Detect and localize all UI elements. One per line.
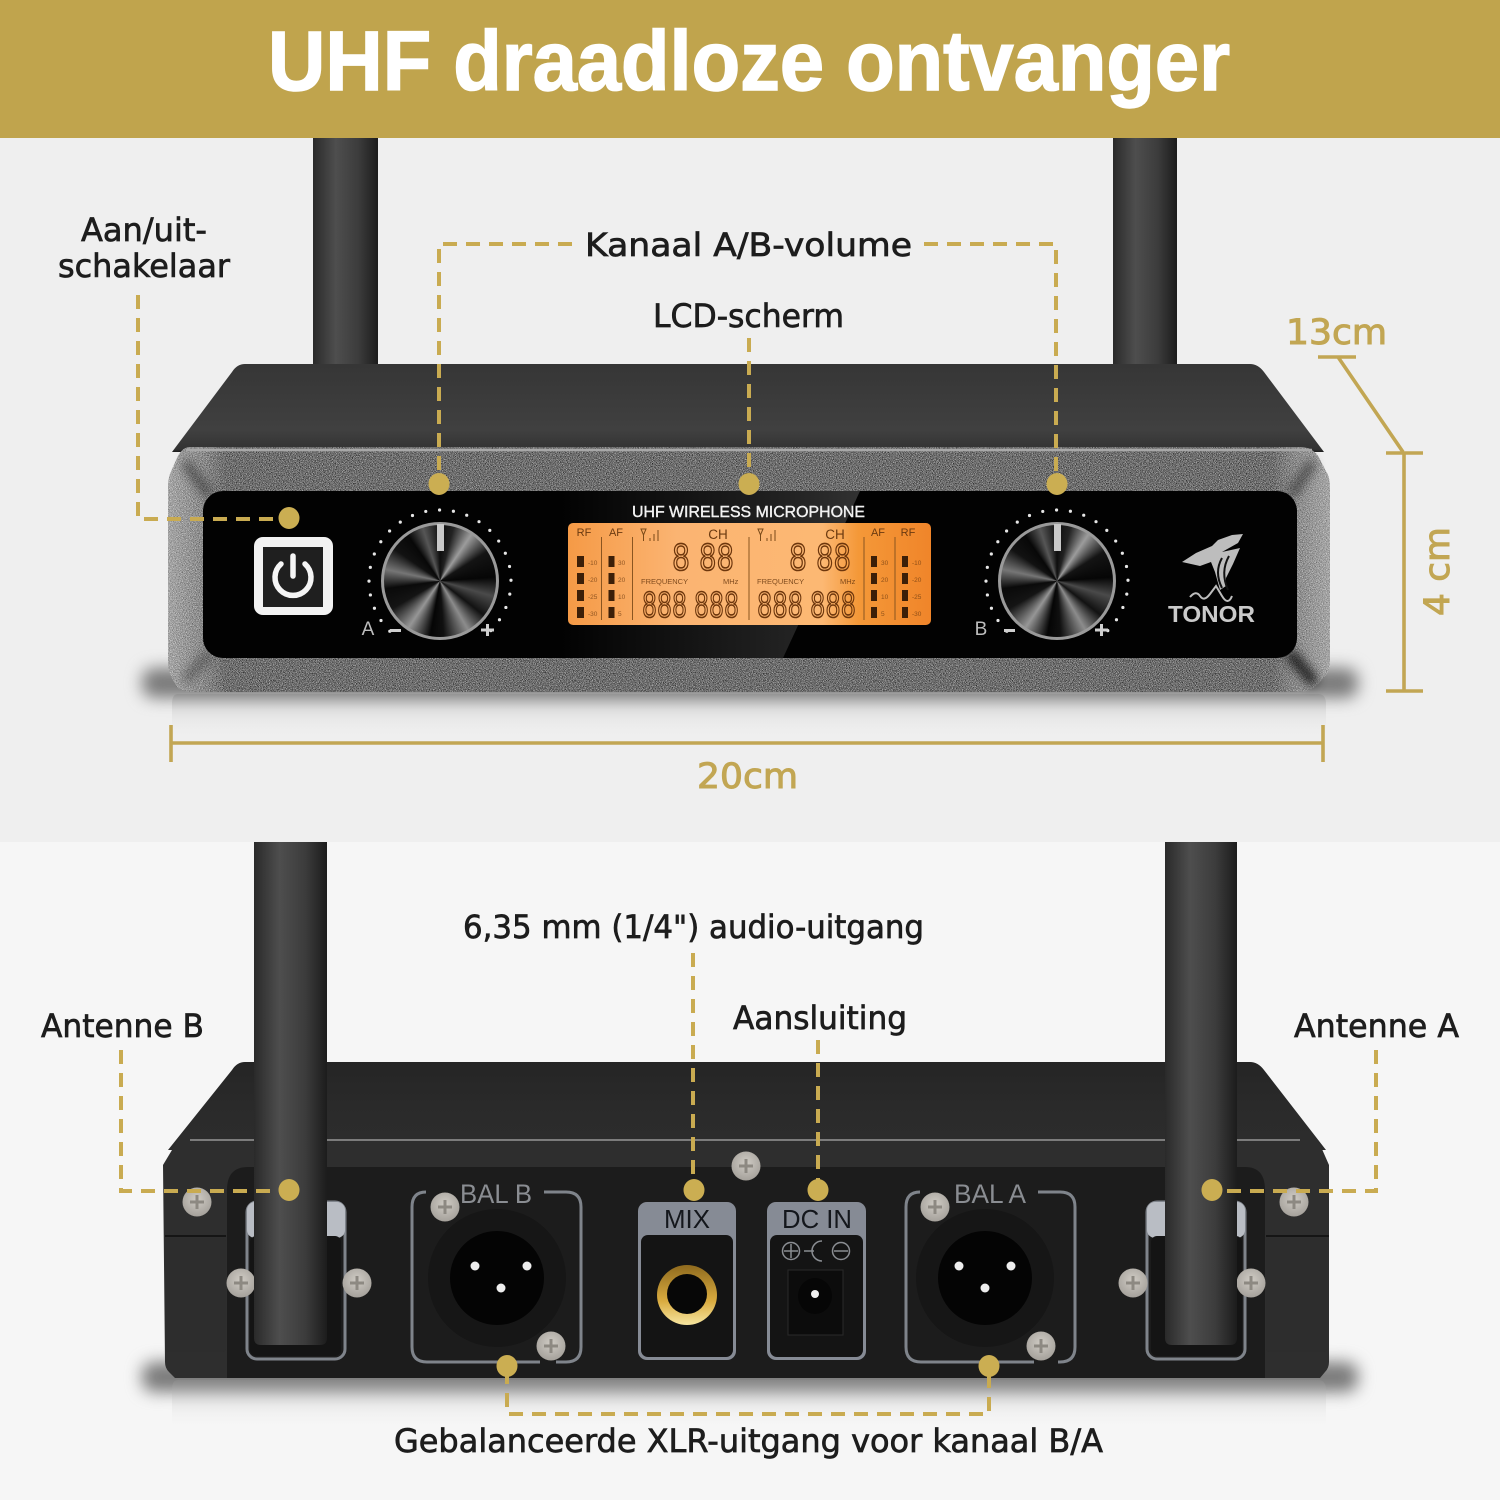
antenna: top left	[313, 138, 378, 368]
XLR plate A: BAL A	[954, 1179, 1026, 1209]
title band	[0, 0, 1500, 138]
knob A	[362, 510, 511, 640]
label: audio output	[463, 908, 924, 1201]
LCD screen: AF	[871, 527, 885, 539]
antenna: top right	[1113, 138, 1177, 368]
LCD screen: AF	[609, 527, 623, 539]
LCD screen: FREQUENCY	[757, 577, 804, 586]
LCD screen: 30	[881, 560, 889, 567]
TONOR logo: TONOR	[1168, 601, 1255, 627]
LCD screen: 8	[672, 538, 690, 583]
DC IN socket: DC IN	[782, 1204, 852, 1234]
knob B	[975, 510, 1128, 640]
LCD screen: -10	[588, 560, 598, 567]
label: channel volume: Kanaal A/B-volume	[585, 226, 912, 264]
LCD screen: 888	[642, 586, 687, 629]
LCD screen: 20	[618, 577, 626, 584]
title: UHF draadloze ontvanger	[268, 14, 1230, 108]
reflection	[172, 1380, 1326, 1428]
antenna screws left	[182, 1188, 372, 1298]
LCD screen: 30	[618, 560, 626, 567]
LCD screen: 88	[816, 538, 851, 583]
device rear face	[163, 1140, 1329, 1378]
reflection	[172, 694, 1326, 738]
TONOR logo	[1168, 534, 1255, 627]
MIX jack	[638, 1202, 736, 1360]
LCD screen: -30	[588, 611, 598, 618]
LCD screen: RF	[901, 527, 916, 539]
LCD screen: -30	[912, 611, 922, 618]
label: LCD screen	[653, 297, 844, 495]
top panel background	[0, 138, 1500, 842]
dimension: width 20cm	[171, 725, 1323, 797]
device top surface	[168, 1062, 1326, 1150]
antenna screws right	[1118, 1188, 1308, 1298]
label: balanced XLR outputs: Gebalanceerde XLR-uitgang voor kanaal B/A	[394, 1422, 1103, 1460]
dimension: width 20cm: 20cm	[697, 757, 798, 797]
center screw	[732, 1152, 760, 1180]
label: LCD screen: LCD-scherm	[653, 297, 844, 335]
LCD screen: 88	[699, 538, 734, 583]
dimension: depth 13cm	[1286, 313, 1403, 452]
LCD heading: UHF WIRELESS MICROPHONE	[632, 504, 865, 521]
left antenna port plate	[247, 1202, 345, 1359]
label: antenna A: Antenne A	[1294, 1007, 1459, 1045]
XLR plate B	[412, 1179, 581, 1362]
dimension: height 4 cm	[1386, 453, 1458, 691]
power button	[254, 537, 333, 615]
black control panel	[203, 491, 1297, 658]
device front face	[168, 447, 1330, 692]
LCD screen: 888	[694, 586, 739, 629]
XLR plate A	[906, 1179, 1075, 1362]
label: channel volume	[428, 226, 1068, 495]
LCD screen: 5	[881, 611, 885, 618]
dimension: height 4 cm: 4 cm	[1418, 527, 1458, 616]
shadow	[142, 1362, 1358, 1392]
LCD screen: -25	[912, 594, 922, 601]
label: power switch: Aan/uit-	[81, 211, 207, 249]
LCD screen: FREQUENCY	[641, 577, 688, 586]
LCD screen: MHz	[723, 577, 739, 586]
bottom panel background	[0, 842, 1500, 1500]
knob B: B	[975, 619, 987, 640]
label: antenna B	[41, 1007, 300, 1201]
LCD screen: -20	[912, 577, 922, 584]
device top surface	[172, 364, 1324, 452]
LCD screen: -10	[912, 560, 922, 567]
antenna: rear left	[254, 842, 327, 1345]
label: antenna A	[1202, 1007, 1459, 1201]
LCD screen: CH	[825, 527, 845, 542]
label: balanced XLR outputs	[394, 1355, 1103, 1460]
LCD screen: 8	[789, 538, 807, 583]
LCD screen: CH	[708, 527, 728, 542]
LCD screen: 888	[757, 586, 803, 629]
LCD screen: -25	[588, 594, 598, 601]
LCD screen	[568, 523, 931, 629]
label: audio output: 6,35 mm (1/4") audio-uitgang	[463, 908, 924, 946]
right antenna port plate	[1147, 1202, 1245, 1359]
label: power switch: schakelaar	[58, 247, 231, 285]
MIX jack: MIX	[664, 1204, 710, 1234]
knob A: A	[362, 619, 375, 640]
panel glare	[560, 491, 860, 658]
shadow	[142, 668, 1358, 698]
DC IN socket	[767, 1202, 866, 1360]
LCD screen: 10	[618, 594, 626, 601]
rear view receiver	[142, 842, 1358, 1428]
dimension: depth 13cm: 13cm	[1286, 313, 1387, 353]
LCD screen: RF	[577, 527, 592, 539]
LCD screen: -20	[588, 577, 598, 584]
label: antenna B: Antenne B	[41, 1007, 204, 1045]
LCD screen: 10	[881, 594, 889, 601]
XLR plate B: BAL B	[460, 1179, 532, 1209]
label: power connection: Aansluiting	[733, 999, 907, 1037]
front view receiver	[142, 138, 1358, 738]
label: power connection	[733, 999, 907, 1201]
label: power switch	[58, 211, 300, 529]
LCD screen: 5	[618, 611, 622, 618]
LCD screen: MHz	[840, 577, 856, 586]
antenna: rear right	[1165, 842, 1237, 1345]
LCD screen: 888	[810, 586, 856, 629]
LCD screen: 20	[881, 577, 889, 584]
